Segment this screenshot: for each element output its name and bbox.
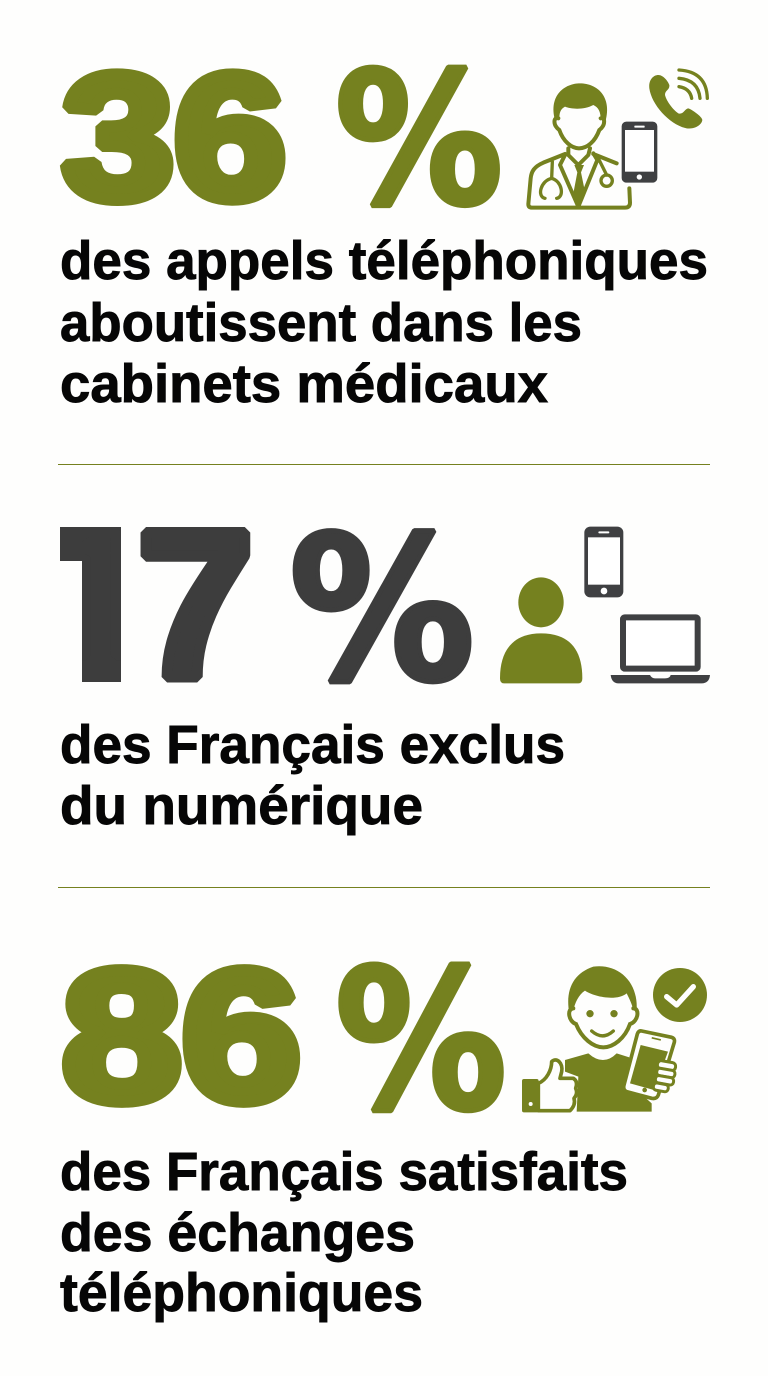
text: description 36: aboutissent dans les bbox=[60, 293, 582, 353]
stat number: 17 %: 1 bbox=[33, 487, 158, 722]
text: description 86: des échanges bbox=[60, 1203, 415, 1263]
stat number: 86 %: % bbox=[335, 928, 507, 1154]
panel: 17 percent bbox=[60, 526, 710, 836]
stat number: 86 % bbox=[62, 928, 507, 1154]
text: description 86: des Français satisfaits bbox=[60, 1142, 628, 1202]
stat number: 36 % bbox=[62, 34, 503, 247]
stat number: 17 %: % bbox=[289, 494, 475, 727]
text: description 17: des Français exclus bbox=[60, 715, 565, 775]
panel: 36 percent bbox=[60, 34, 708, 414]
stat number: 17 %: 7 bbox=[137, 487, 254, 722]
text: description 36: des appels téléphoniques bbox=[60, 231, 708, 291]
stat number: 36 %: 36 bbox=[62, 38, 286, 236]
stat number: 17 % bbox=[60, 527, 472, 684]
panel: 86 percent bbox=[60, 928, 707, 1323]
icon: smiling man with phone and thumbs up bbox=[522, 966, 707, 1112]
text: description 17 bbox=[60, 715, 565, 836]
stat number: 86 %: 86 bbox=[62, 933, 301, 1140]
icon: person with phone and laptop bbox=[500, 527, 710, 683]
icon: doctor with phone bbox=[528, 70, 707, 208]
text: description 17: du numérique bbox=[60, 776, 423, 836]
text: description 86: téléphoniques bbox=[60, 1263, 423, 1323]
stat number: 36 %: % bbox=[335, 34, 503, 247]
text: description 86 bbox=[60, 1142, 628, 1323]
text: description 36 bbox=[60, 231, 708, 414]
text: description 36: cabinets médicaux bbox=[60, 354, 548, 414]
